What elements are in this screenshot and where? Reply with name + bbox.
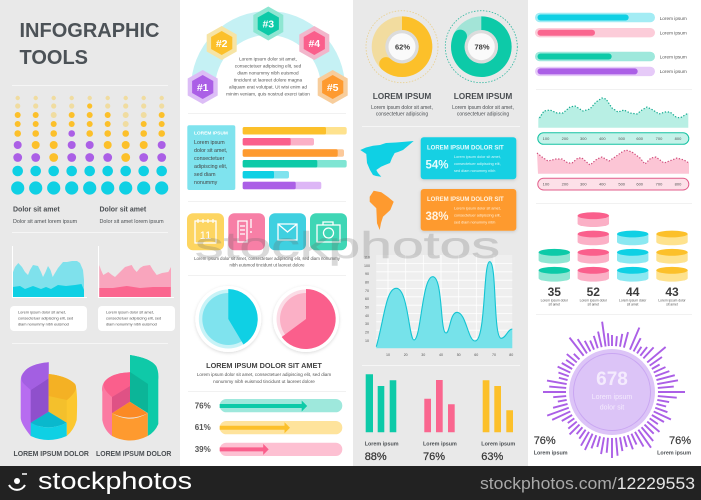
column chart: 88%: 88% (365, 451, 387, 463)
icon row caption (194, 256, 341, 268)
arc body text: aliquam erat volutpat. Ut wisi enim ad (229, 84, 307, 90)
stat: right 76% (657, 435, 691, 456)
column chart: 63% (481, 380, 515, 463)
green axis capsule: 400 (599, 136, 606, 141)
stacked discs: 43: 43 (665, 285, 679, 299)
green axis capsule: 700 (656, 136, 663, 141)
progress arrow: 61%: 61% (195, 423, 211, 432)
stacked discs: 44: Lorem ipsum dolor (619, 298, 647, 302)
chart axis labels: 110 (364, 256, 370, 260)
donut captions: LOREM IPSUM (373, 91, 431, 101)
stat card: 54%: consectetuer adipiscing elit, (454, 162, 501, 166)
column chart: 76%: Lorem ipsum (423, 442, 457, 448)
note card: right: diam nonummy nibh euismod (106, 322, 157, 326)
stacked discs: 52 (578, 212, 609, 306)
progress arrow: 39%: 39% (195, 445, 211, 454)
horizontal bar chart (243, 127, 347, 189)
donut captions: LOREM IPSUM (454, 91, 512, 101)
slider labels: Lorem ipsum (660, 16, 687, 21)
stat card: 54%: 54% (426, 160, 449, 172)
pink axis capsule: 500 (618, 182, 626, 187)
donut chart: 62%: 62% (395, 43, 410, 52)
radial burst gauge: Lorem ipsum (592, 394, 632, 401)
stat card: 54% (421, 137, 516, 179)
stacked discs: 44: sit amet (627, 302, 639, 306)
arc body text (226, 56, 310, 96)
legend panel: nonummy (194, 180, 218, 186)
stacked discs: 52: Lorem ipsum dolor (580, 298, 608, 302)
chart axis labels: 30 (365, 322, 369, 326)
progress arrow: 61% (195, 421, 342, 434)
donut chart: 78% (445, 11, 517, 83)
arc body text: minim veniam, quis nostrud exerci tation (226, 92, 310, 96)
green axis capsule (538, 133, 689, 144)
hexagon arc timeline (188, 6, 348, 104)
chart axis labels: 60 (365, 297, 369, 301)
donut chart: 78%: 78% (474, 43, 490, 52)
chart axis labels: 10 (365, 339, 369, 343)
area chart: cyan (12, 246, 87, 298)
hexagon 1 (188, 70, 218, 104)
title (20, 20, 160, 69)
radial burst gauge: dolor sit (600, 404, 624, 412)
stacked discs: 43 (656, 231, 688, 306)
stacked discs: 35: 35 (548, 285, 561, 299)
hexagon 2 (207, 26, 237, 60)
column chart: 88%: Lorem ipsum (365, 442, 399, 448)
hexagon 5: #5 (327, 82, 339, 94)
pink axis capsule: 100 (543, 182, 550, 187)
area chart: pink (98, 246, 174, 298)
note card: left: Lorem ipsum dolor sit amet, (18, 310, 66, 314)
stacked discs: 43: sit amet (666, 302, 678, 306)
legend panel: consectetuer (194, 156, 225, 162)
column chart: 88% (365, 374, 399, 463)
column chart: 63%: Lorem ipsum (481, 442, 515, 448)
stacked discs: 44 (617, 231, 648, 306)
slider labels: Lorem ipsum (660, 30, 687, 36)
stat card: 54%: sed diam nonummy nibh (454, 169, 495, 173)
stat: left 76%: 76% (534, 435, 556, 447)
chart axis labels: 60 (474, 353, 478, 357)
donut captions (371, 91, 514, 118)
green axis capsule: 300 (580, 136, 587, 141)
donut captions: Lorem ipsum dolor sit amet, (452, 105, 514, 111)
footer logo icon (9, 474, 27, 490)
stat: right 76%: Lorem ipsum (657, 450, 691, 456)
stacked discs: 35: sit amet (549, 302, 560, 306)
dot matrix chart (11, 96, 168, 195)
note card: right (98, 306, 175, 331)
chart axis labels: 20 (365, 330, 369, 334)
footer band (0, 466, 701, 500)
icon: camera (310, 213, 347, 250)
hexagon 4 (299, 26, 329, 60)
line area chart (364, 255, 513, 357)
chart axis labels: 50 (365, 306, 369, 310)
title: TOOLS (20, 47, 88, 69)
pink axis capsule (538, 178, 689, 190)
stat card: 54%: Lorem ipsum dolor sit amet, (454, 155, 501, 159)
progress arrow: 39% (195, 443, 342, 456)
map: south america (370, 191, 394, 230)
watermark: stockphotos (195, 225, 500, 266)
legend panel (187, 125, 235, 190)
stat: left 76% (534, 435, 568, 456)
pink axis capsule: 400 (599, 182, 606, 187)
slider bars (535, 13, 687, 76)
radial burst gauge: 678 (596, 369, 628, 390)
chart axis labels: 10 (386, 353, 390, 357)
stacked discs: 35 (539, 249, 570, 306)
progress arrow: 76%: 76% (195, 402, 211, 410)
chart axis labels: 20 (404, 353, 408, 357)
stacked discs: 35: Lorem ipsum dolor (541, 298, 569, 302)
chart axis labels: 40 (365, 314, 369, 318)
pink axis capsule: 300 (580, 182, 587, 187)
column chart: 76% (423, 380, 457, 463)
legend panel: LOREM IPSUM (194, 130, 228, 136)
donut captions: consectetuer adipiscing (376, 112, 428, 118)
stacked discs: 52: 52 (587, 285, 600, 299)
stacked discs: 43: Lorem ipsum dolor (658, 298, 687, 302)
green axis capsule: 100 (543, 136, 550, 141)
slider labels (660, 16, 687, 74)
stacked discs: 44: 44 (626, 285, 640, 299)
dotted area chart: pink (537, 150, 689, 190)
dot chart captions: Dolor sit amet (100, 206, 147, 214)
stat card: 38%: consectetuer adipiscing elit, (454, 214, 501, 218)
map: north america (360, 141, 414, 177)
note card: left (10, 306, 87, 331)
hexagon 5 (318, 70, 348, 104)
arc body text: diam nonummy nibh euismod (237, 70, 299, 76)
title: INFOGRAPHIC (20, 20, 160, 42)
arc body text: Lorem ipsum dolor sit amet, (239, 56, 297, 62)
icon: calendar (187, 213, 224, 250)
chart axis labels: 90 (365, 272, 369, 276)
donut chart: 62% (366, 11, 438, 83)
green axis capsule: 500 (618, 136, 626, 141)
note card: left: consectetuer adipiscing elit, sed (18, 316, 73, 320)
slider labels: Lorem ipsum (660, 54, 687, 60)
note card: left: diam nonummy nibh euismod (18, 322, 69, 326)
arc body text: consectetuer adipiscing elit, sed (235, 64, 302, 68)
green axis capsule: 800 (675, 136, 682, 141)
stat card: 38% (421, 189, 516, 231)
radial burst gauge (543, 322, 685, 458)
3d pie captions: LOREM IPSUM DOLOR (14, 451, 89, 458)
pie caption: Lorem ipsum dolor sit amet, consectetuer adipiscing elit, sed diam (197, 372, 331, 377)
stat card: 38%: Lorem ipsum dolor sit amet, (454, 206, 501, 210)
chart axis labels: 80 (509, 353, 513, 357)
pink axis capsule: 600 (636, 182, 644, 187)
chart axis labels (364, 256, 513, 357)
legend panel: sed diam (194, 172, 216, 178)
3d pie captions (14, 451, 171, 458)
stat card: 38%: 38% (426, 211, 449, 223)
pie caption (197, 361, 331, 384)
dot chart captions: Dolor sit amet lorem ipsum (13, 219, 78, 225)
legend panel: dolor sit amet, (194, 148, 227, 154)
icon: envelope (269, 213, 306, 250)
slider labels: Lorem ipsum (660, 69, 687, 74)
stat: right 76%: 76% (669, 435, 691, 447)
green axis capsule: 200 (562, 136, 569, 141)
stat card: 38%: sed diam nonummy nibh (454, 220, 495, 224)
3d pie: pink green orange (102, 355, 158, 440)
dot chart captions (13, 206, 164, 225)
chart axis labels: 70 (365, 289, 369, 293)
pie caption: LOREM IPSUM DOLOR SIT AMET (206, 361, 322, 370)
green axis capsule: 600 (636, 136, 644, 141)
hexagon 2: #2 (216, 38, 228, 50)
dot chart captions: Dolor sit amet (13, 206, 60, 214)
dotted area chart: green (538, 98, 689, 144)
icon: calendar: 11 (200, 230, 211, 242)
stat card: 54%: LOREM IPSUM DOLOR SIT (427, 146, 504, 152)
donut captions: Lorem ipsum dolor sit amet, (371, 105, 433, 111)
column chart: 76%: 76% (423, 451, 445, 463)
footer image id: stockphotos.com/ 12229553 (480, 474, 695, 493)
chart axis labels: 30 (421, 353, 425, 357)
pink axis capsule: 800 (675, 182, 682, 187)
hexagon 3 (253, 6, 283, 40)
note card: right: consectetuer adipiscing elit, sed (106, 316, 161, 320)
icon: clipboard (228, 213, 265, 250)
icon row caption: nibh euismod tincidunt ut laoreet dolore (229, 262, 305, 268)
column chart: 63%: 63% (481, 451, 504, 463)
hexagon 1: #1 (197, 82, 209, 94)
progress arrow: 76% (195, 399, 342, 412)
hexagon 3: #3 (262, 18, 274, 30)
arc body text: tincidunt ut laoreet dolore magna (234, 78, 303, 82)
chart axis labels: 50 (457, 353, 461, 357)
pie chart: pink (273, 286, 339, 352)
pink axis capsule: 200 (562, 182, 569, 187)
stat: left 76%: Lorem ipsum (534, 450, 568, 456)
stat card: 38%: LOREM IPSUM DOLOR SIT (427, 197, 504, 203)
legend panel: adipiscing elit, (194, 164, 227, 170)
pie caption: nonummy nibh euismod tincidunt ut laoreet dolore (213, 379, 315, 384)
icon row caption: Lorem ipsum dolor sit amet, consectetuer adipiscing elit, sed diam nonummy (194, 256, 341, 261)
chart axis labels: 100 (364, 264, 370, 268)
dot chart captions: Dolor sit amet lorem ipsum (100, 219, 164, 225)
pie chart: cyan (195, 286, 261, 352)
3d pie captions: LOREM IPSUM DOLOR (96, 451, 171, 458)
chart axis labels: 80 (365, 280, 369, 284)
legend panel: Lorem ipsum (194, 140, 225, 146)
note card: right: Lorem ipsum dolor sit amet, (106, 310, 154, 314)
pink axis capsule: 700 (656, 182, 663, 187)
chart axis labels: 70 (492, 353, 496, 357)
footer logo text: stockphotos (38, 468, 192, 495)
hexagon 4: #4 (308, 38, 320, 50)
3d pie: purple yellow cyan (21, 362, 77, 440)
chart axis labels: 40 (439, 353, 443, 357)
donut captions: consectetuer adipiscing (457, 112, 509, 118)
stacked discs: 52: sit amet (588, 302, 599, 306)
